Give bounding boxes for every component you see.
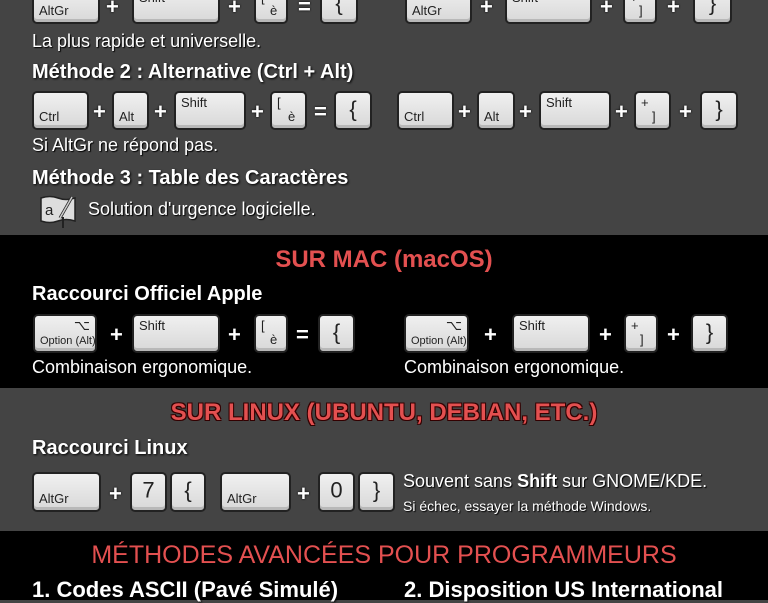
mac keys: ⌥ xyxy=(74,317,90,333)
row 2 keys: ctrl+alt: = xyxy=(314,99,327,124)
title: linux: SUR LINUX (UBUNTU, DEBIAN, ETC.) xyxy=(171,399,597,426)
row 2 keys: ctrl+alt: Shift xyxy=(546,95,572,110)
heading: method 2: Méthode 2 : Alternative (Ctrl + Alt) xyxy=(32,61,353,83)
mac keys: { xyxy=(333,319,340,344)
row 2 keys: ctrl+alt: Ctrl xyxy=(404,109,424,124)
mac keys: } xyxy=(706,319,713,344)
heading: apple shortcut: Raccourci Officiel Apple xyxy=(32,283,262,305)
mac keys: = xyxy=(296,322,309,347)
text: mac note left: Combinaison ergonomique. xyxy=(32,357,252,377)
mac keys: [ xyxy=(261,318,265,333)
mac keys: Option (Alt) xyxy=(40,335,96,347)
heading: method 3: Méthode 3 : Table des Caractères xyxy=(32,167,348,189)
row 2 keys: ctrl+alt: [ xyxy=(277,95,281,110)
linux keys: } xyxy=(373,478,380,503)
heading: us international: 2. Disposition US International xyxy=(404,577,723,602)
title: advanced methods: MÉTHODES AVANCÉES POUR PROGRAMMEURS xyxy=(91,541,677,569)
mac keys: Option (Alt) xyxy=(411,335,467,347)
mac keys: + xyxy=(110,322,123,347)
mac keys: + xyxy=(631,318,639,333)
row 2 keys: ctrl+alt: + xyxy=(641,95,649,110)
row 2 keys: ctrl+alt: Alt xyxy=(119,109,134,124)
mac keys: + xyxy=(484,322,497,347)
linux keys: { xyxy=(184,478,192,503)
mac keys: è xyxy=(270,332,277,347)
row 2 keys: ctrl+alt: + xyxy=(93,99,106,124)
row 2 keys: ctrl+alt: Shift xyxy=(181,95,207,110)
row 2 keys: ctrl+alt xyxy=(32,91,738,130)
heading: linux shortcut: Raccourci Linux xyxy=(32,437,188,459)
band: mac background xyxy=(0,235,768,388)
row 2 keys: ctrl+alt: Alt xyxy=(484,109,499,124)
linux keys xyxy=(32,472,395,512)
mac keys: Shift xyxy=(519,318,545,333)
text: method 2 note: Si AltGr ne répond pas. xyxy=(32,135,218,155)
mac keys: Shift xyxy=(139,318,165,333)
text: method 3 note: Solution d'urgence logicielle. xyxy=(88,199,316,219)
linux keys: 0 xyxy=(330,478,343,503)
row 2 keys: ctrl+alt: { xyxy=(349,96,357,121)
linux keys: 7 xyxy=(142,478,155,503)
mac keys xyxy=(33,314,728,353)
row 2 keys: ctrl+alt: + xyxy=(154,99,167,124)
band: advanced background xyxy=(0,531,768,600)
linux keys: AltGr xyxy=(227,491,257,506)
linux keys: AltGr xyxy=(39,491,69,506)
mac keys: + xyxy=(599,322,612,347)
row 1 keys: windows altgr: ] xyxy=(639,3,643,18)
heading: ascii codes: 1. Codes ASCII (Pavé Simulé) xyxy=(32,577,338,602)
linux keys: + xyxy=(297,481,310,506)
row 2 keys: ctrl+alt: + xyxy=(679,99,692,124)
mac keys: ] xyxy=(640,332,644,347)
mac keys: + xyxy=(228,322,241,347)
row 2 keys: ctrl+alt: è xyxy=(288,109,295,124)
row 1 keys: windows altgr: è xyxy=(270,3,277,18)
mac keys: + xyxy=(667,322,680,347)
text: method 1 note: La plus rapide et universelle. xyxy=(32,31,261,51)
row 1 keys: windows altgr xyxy=(32,0,732,24)
text: linux note: Souvent sans Shift sur GNOME/KDE. xyxy=(403,471,707,491)
row 2 keys: ctrl+alt: ] xyxy=(652,109,656,124)
row 2 keys: ctrl+alt: + xyxy=(519,99,532,124)
row 2 keys: ctrl+alt: } xyxy=(715,96,723,121)
row 1 keys: windows altgr: AltGr xyxy=(412,3,442,18)
icon: character map xyxy=(40,196,76,228)
row 2 keys: ctrl+alt: Ctrl xyxy=(39,109,59,124)
title: mac: SUR MAC (macOS) xyxy=(275,246,493,273)
icon: character map: a xyxy=(45,202,54,219)
row 2 keys: ctrl+alt: + xyxy=(615,99,628,124)
linux keys: + xyxy=(109,481,122,506)
row 1 keys: windows altgr: AltGr xyxy=(39,3,69,18)
mac keys: ⌥ xyxy=(446,317,462,333)
row 2 keys: ctrl+alt: + xyxy=(251,99,264,124)
row 2 keys: ctrl+alt: + xyxy=(458,99,471,124)
text: mac note right: Combinaison ergonomique. xyxy=(404,357,624,377)
text: linux subnote: Si échec, essayer la méthode Windows. xyxy=(403,498,651,514)
